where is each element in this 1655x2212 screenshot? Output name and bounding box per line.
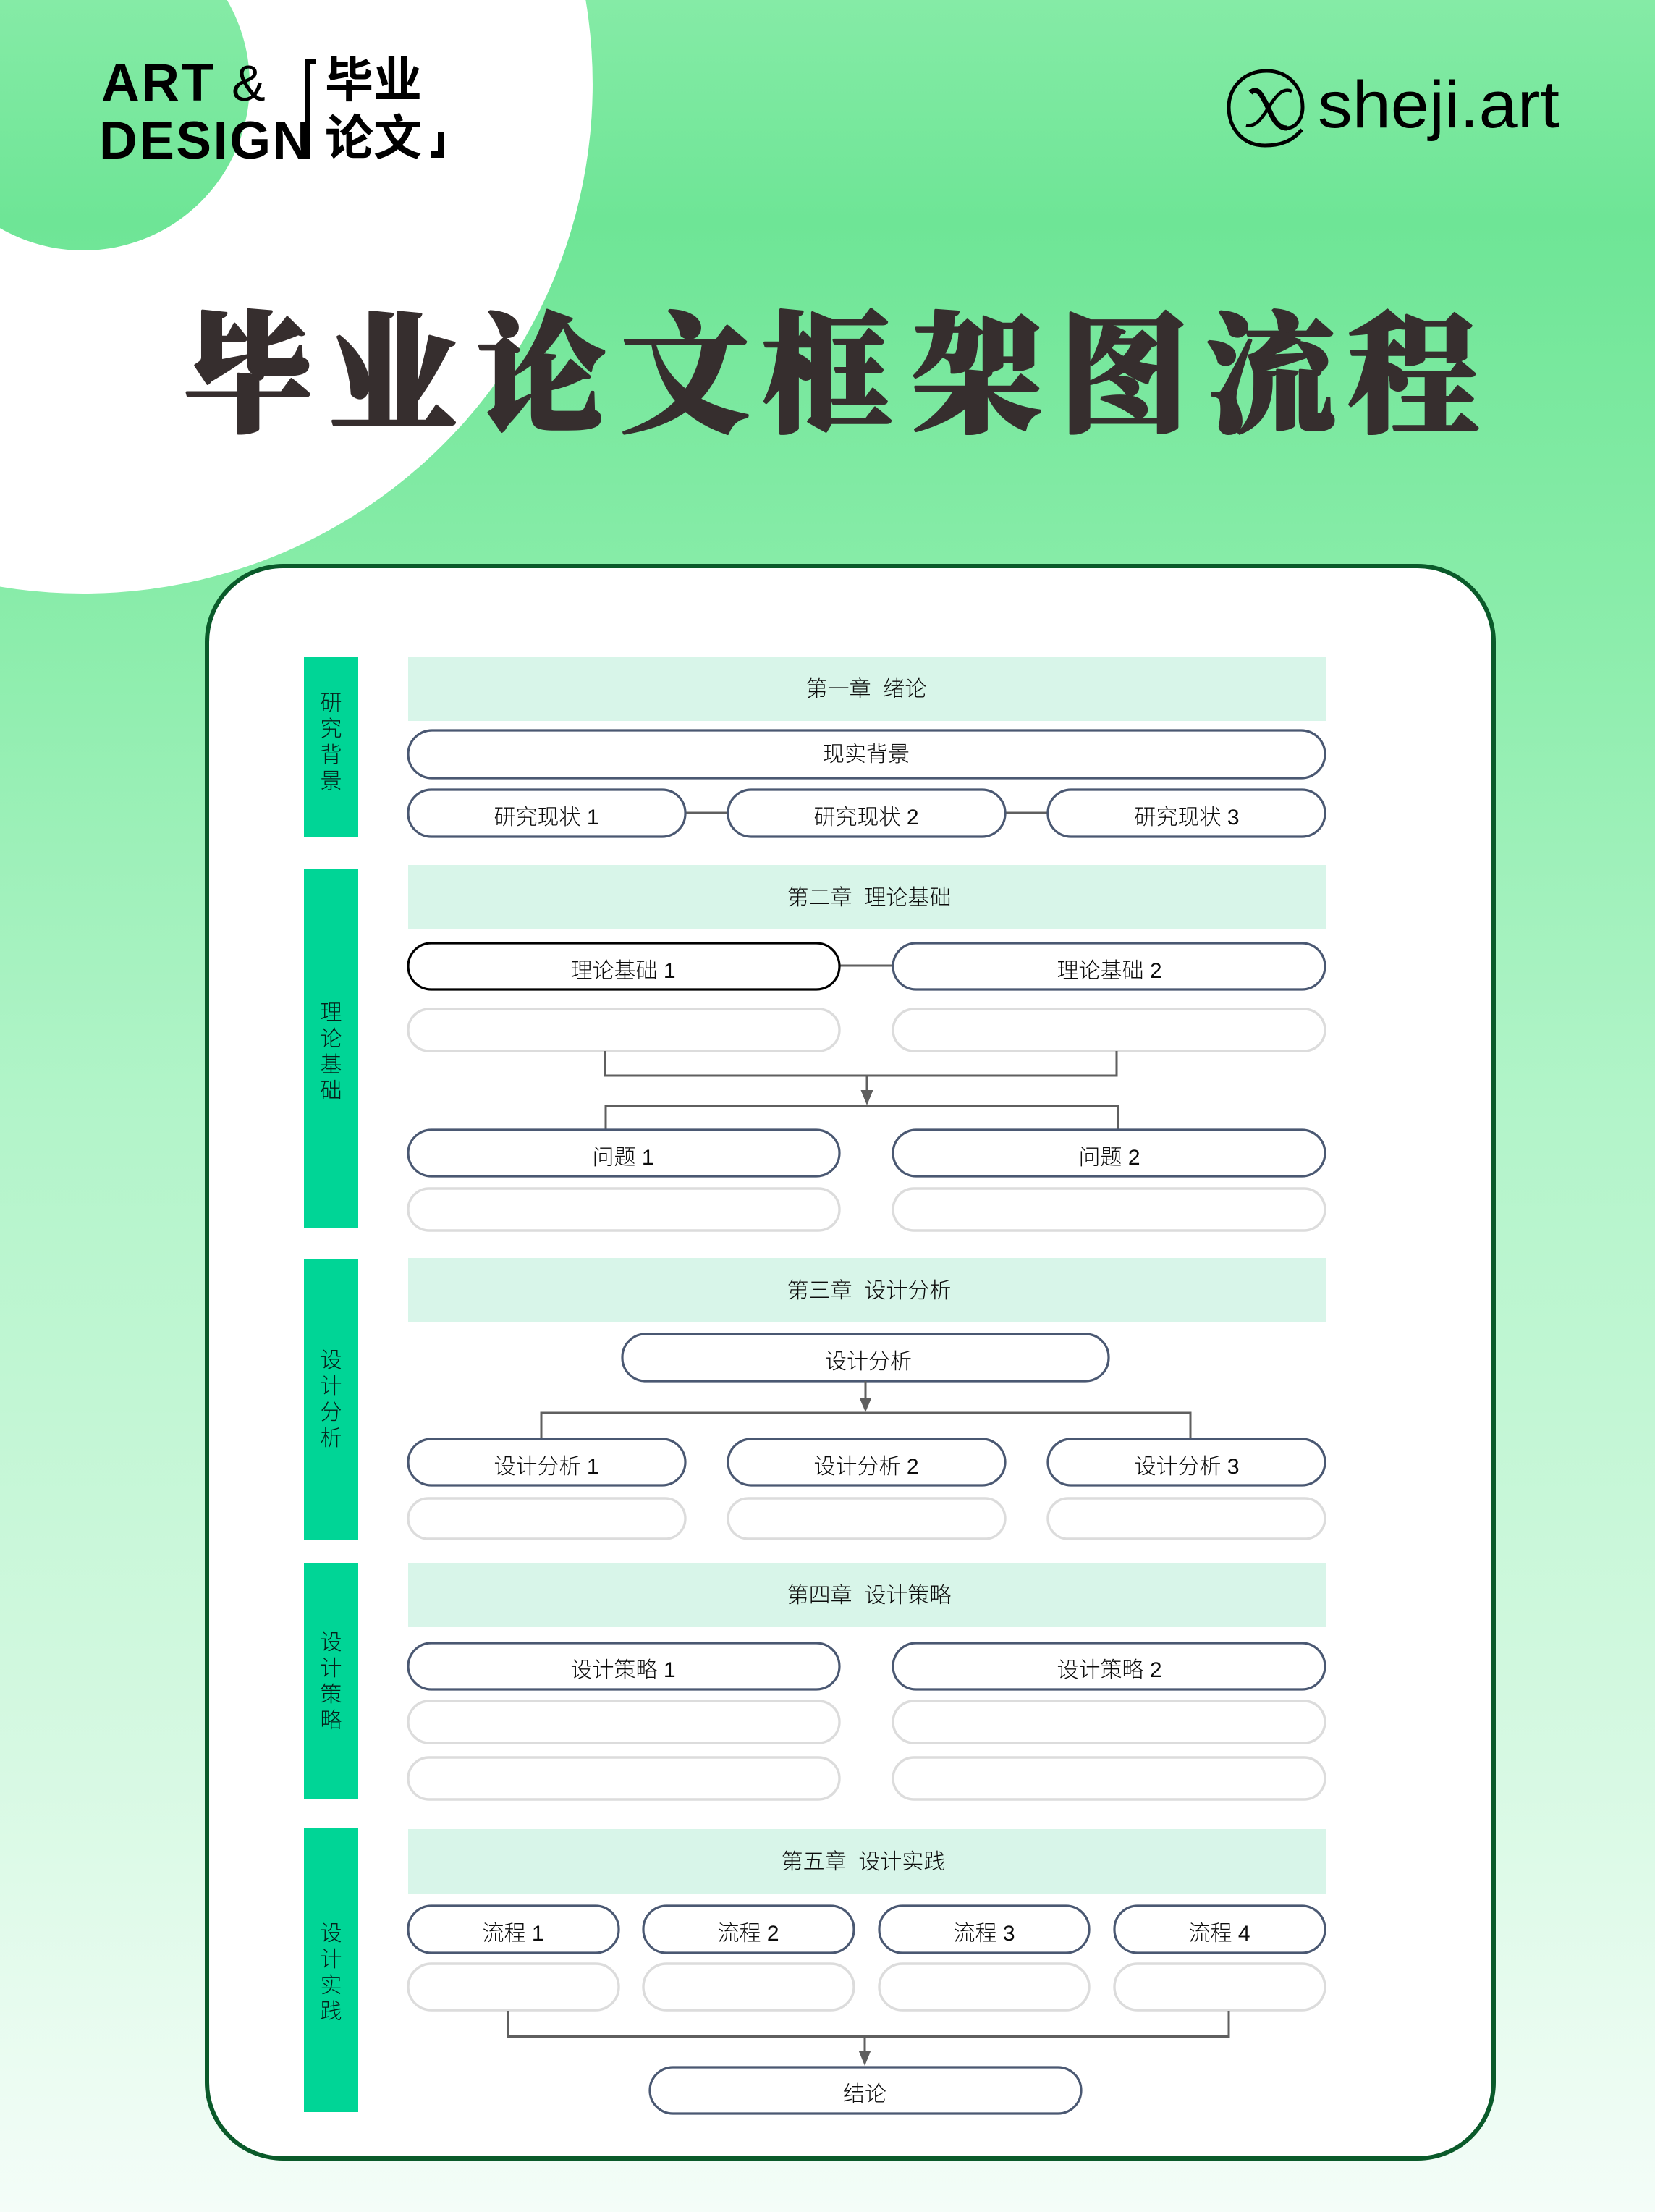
section: 设计策略: 略 <box>320 1709 342 1733</box>
section: 理论基础 <box>304 865 1326 1230</box>
panel: framework card <box>207 566 1494 2158</box>
section: 设计分析 <box>304 1258 1326 1540</box>
section: 设计实践: 设 <box>320 1922 342 1946</box>
section: 研究背景 <box>304 657 1326 837</box>
section: 设计分析: 设 <box>320 1348 342 1372</box>
section: 设计实践: 实 <box>320 1974 342 1998</box>
logo: ART & DESIGN 毕业论文: 毕业 <box>325 54 422 108</box>
section: 研究背景: 第一章 绪论 <box>806 677 926 701</box>
section: 研究背景: 现实背景 <box>823 743 910 767</box>
section: 设计策略: 计 <box>320 1657 342 1681</box>
section: 理论基础: 问题 1 <box>592 1146 654 1170</box>
section: 设计策略: 第四章 设计策略 <box>787 1584 951 1608</box>
logo: sheji.art <box>1229 68 1559 145</box>
section: 研究背景: 研究现状 3 <box>1134 806 1240 830</box>
section: 设计分析: 分 <box>320 1401 342 1424</box>
section: 理论基础: 基 <box>320 1053 342 1077</box>
section: 理论基础: 第二章 理论基础 <box>787 886 951 910</box>
section: 设计策略 <box>304 1563 1326 1799</box>
decorative white ring <box>0 0 593 594</box>
section: 设计实践: 践 <box>320 2000 342 2024</box>
section: 研究背景: 研 <box>320 691 342 715</box>
section: 设计分析: 第三章 设计分析 <box>787 1279 951 1303</box>
section: 设计分析: 设计分析 2 <box>813 1455 919 1479</box>
section: 设计分析: 计 <box>320 1375 342 1398</box>
section: 设计实践: 计 <box>320 1948 342 1972</box>
section: 研究背景: 景 <box>320 769 342 793</box>
section: 理论基础: 理 <box>320 1001 342 1025</box>
section: 设计策略: 设计策略 1 <box>570 1658 676 1682</box>
section: 研究背景: 背 <box>320 743 342 767</box>
section: 理论基础: 论 <box>320 1027 342 1051</box>
section: 设计实践 <box>304 1828 1326 2114</box>
section: 设计实践: 流程 2 <box>717 1922 779 1946</box>
section: 设计策略: 策 <box>320 1683 342 1707</box>
section: 设计分析: 设计分析 1 <box>494 1455 599 1479</box>
section: 设计分析: 设计分析 3 <box>1134 1455 1240 1479</box>
logo: ART & DESIGN 毕业论文: ART <box>101 54 216 112</box>
title: 毕业论文框架图流程 <box>182 305 1478 449</box>
logo: ART & DESIGN 毕业论文: 论文 <box>325 111 422 166</box>
section: 理论基础: 问题 2 <box>1078 1146 1140 1170</box>
logo: ART & DESIGN 毕业论文: & <box>232 55 266 111</box>
section: 研究背景: 研究现状 2 <box>813 806 919 830</box>
section: 设计实践: 结论 <box>843 2082 886 2106</box>
section: 研究背景: 究 <box>320 717 342 741</box>
section: 设计实践: 流程 4 <box>1188 1922 1250 1946</box>
section: 设计分析: 析 <box>320 1427 342 1451</box>
logo: ART & DESIGN 毕业论文: DESIGN <box>99 111 313 170</box>
section: 理论基础: 理论基础 1 <box>570 959 676 983</box>
section: 设计实践: 流程 1 <box>482 1922 544 1946</box>
section: 设计实践: 第五章 设计实践 <box>782 1850 945 1874</box>
section: 设计实践: 流程 3 <box>953 1922 1015 1946</box>
section: 理论基础: 理论基础 2 <box>1057 959 1162 983</box>
logo: ART & DESIGN 毕业论文 <box>99 54 444 170</box>
section: 理论基础: 础 <box>320 1079 342 1103</box>
section: 设计分析: 设计分析 <box>825 1350 912 1374</box>
section: 设计策略: 设计策略 2 <box>1057 1658 1162 1682</box>
section: 设计策略: 设 <box>320 1631 342 1655</box>
section: 研究背景: 研究现状 1 <box>494 806 599 830</box>
logo: sheji.art: sheji.art <box>1318 68 1559 142</box>
